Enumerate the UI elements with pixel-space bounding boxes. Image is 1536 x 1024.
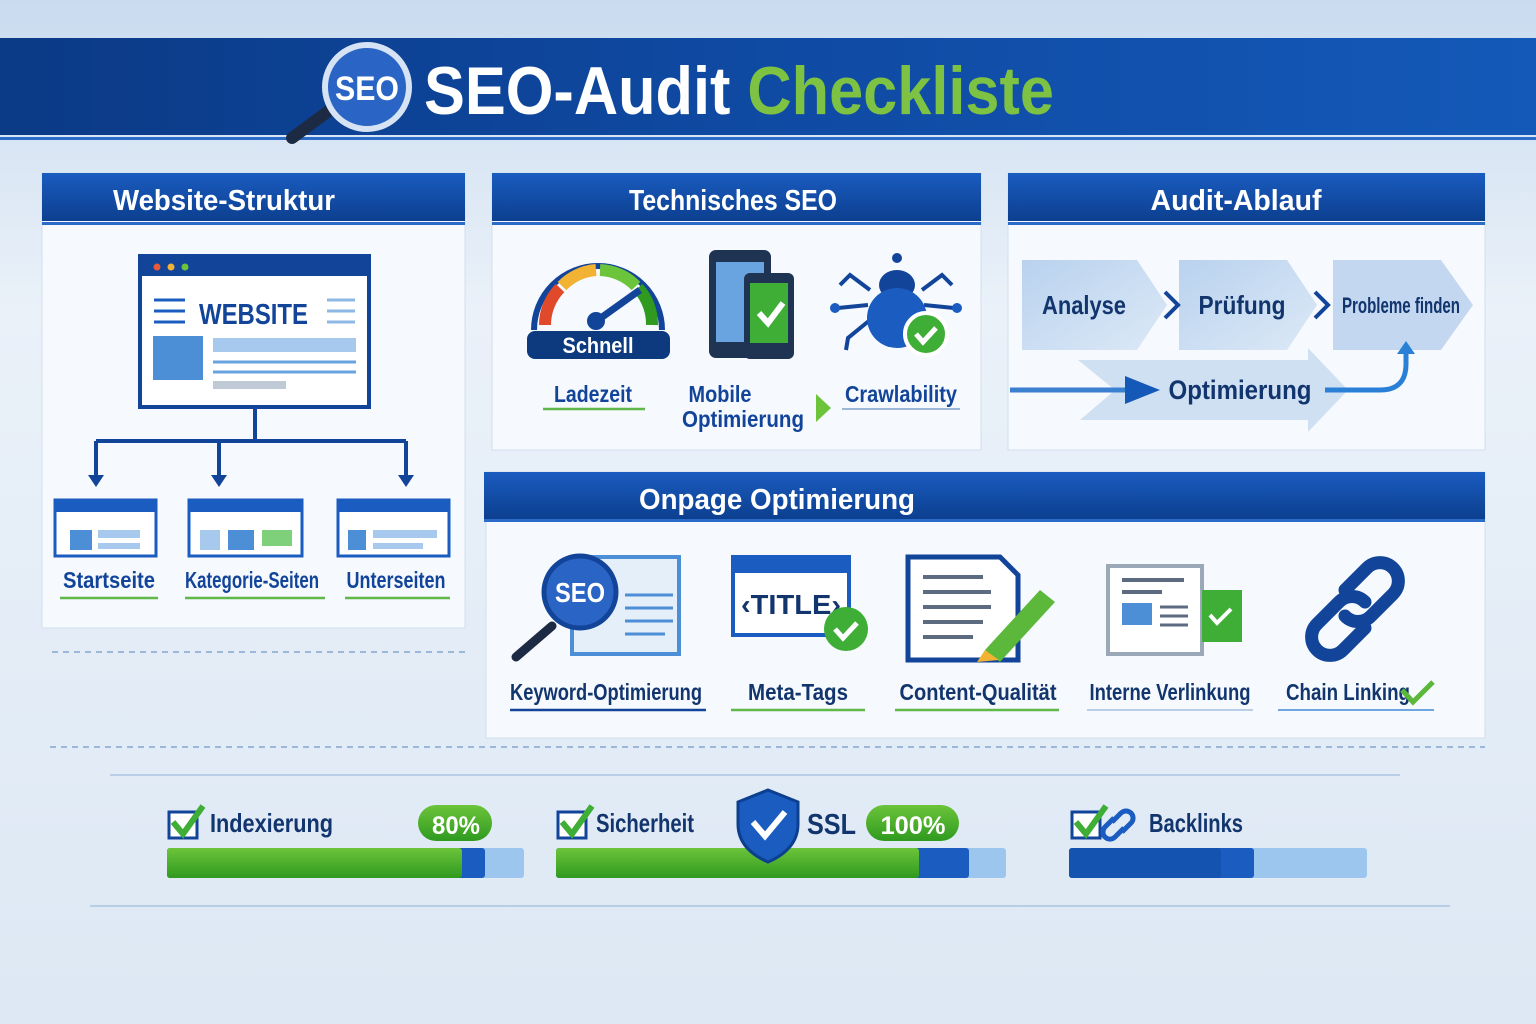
- panel: Website-Struktur: Website-Struktur: [113, 185, 335, 217]
- panel: Website-Struktur: [42, 173, 465, 628]
- icon: keyword: [516, 556, 679, 657]
- header band: [0, 38, 1536, 140]
- tree arrows: [88, 407, 414, 487]
- flow chevrons: Optimierung: [1168, 375, 1312, 405]
- panel: Audit-Ablauf: Audit-Ablauf: [1150, 185, 1322, 217]
- status: Indexierung: [167, 805, 524, 878]
- labels: [543, 381, 960, 432]
- panel: Technisches SEO: [492, 173, 981, 450]
- icon: website window: [140, 256, 369, 407]
- icon: internal links: [1108, 566, 1242, 654]
- labels: Chain Linking: [1286, 679, 1410, 705]
- title: SEO-Audit Checkliste: [424, 53, 1054, 129]
- icon: website window: WEBSITE: [199, 299, 308, 331]
- icon: speedometer: Schnell: [562, 333, 634, 358]
- labels: Kategorie-Seiten: [185, 567, 319, 593]
- status: Sicherheit SSL: SSL: [807, 809, 856, 841]
- icon: content document: [908, 557, 1055, 662]
- icon: chain link: [1312, 563, 1398, 655]
- icon: mobile devices: [709, 250, 794, 359]
- labels: Meta-Tags: [748, 679, 848, 705]
- flow chevrons: Prüfung: [1198, 290, 1286, 320]
- labels: Interne Verlinkung: [1090, 679, 1250, 705]
- flow chevrons: Analyse: [1042, 290, 1126, 320]
- icon: SEO magnifier: SEO: [335, 70, 399, 108]
- status: Sicherheit SSL: Sicherheit: [596, 808, 694, 838]
- icon: title tag: [733, 557, 868, 651]
- panel: Technisches SEO: Technisches SEO: [629, 185, 837, 217]
- icon: title tag: ‹TITLE›: [741, 589, 841, 620]
- icon: keyword: SEO: [555, 577, 605, 608]
- labels: Unterseiten: [346, 567, 446, 593]
- labels: Content-Qualität: [900, 679, 1057, 705]
- icon: speedometer: [527, 266, 670, 359]
- labels: [60, 567, 450, 598]
- labels: [510, 679, 1434, 710]
- panel: Audit-Ablauf: [1008, 173, 1485, 450]
- labels: Mobile: [688, 381, 752, 407]
- status: Sicherheit SSL: 100%: [880, 812, 946, 840]
- labels: Optimierung: [682, 406, 804, 432]
- flow chevrons: [1010, 260, 1473, 432]
- panel: Onpage Optimierung: Onpage Optimierung: [639, 484, 915, 516]
- status: Backlinks: Backlinks: [1149, 808, 1243, 838]
- status: Indexierung: Indexierung: [210, 808, 333, 838]
- sub pages: [55, 500, 449, 556]
- status: Indexierung: 80%: [432, 812, 480, 840]
- labels: Crawlability: [845, 381, 957, 407]
- status: Backlinks: [1069, 806, 1367, 878]
- labels: Keyword-Optimierung: [510, 679, 702, 705]
- status: Sicherheit SSL: [556, 790, 1006, 878]
- panel: Onpage Optimierung: [484, 472, 1485, 738]
- labels: Ladezeit: [554, 381, 632, 407]
- flow chevrons: Probleme finden: [1342, 293, 1460, 318]
- icon: SEO magnifier: [292, 45, 409, 138]
- icon: crawler spider: [830, 253, 962, 355]
- labels: Startseite: [63, 567, 155, 593]
